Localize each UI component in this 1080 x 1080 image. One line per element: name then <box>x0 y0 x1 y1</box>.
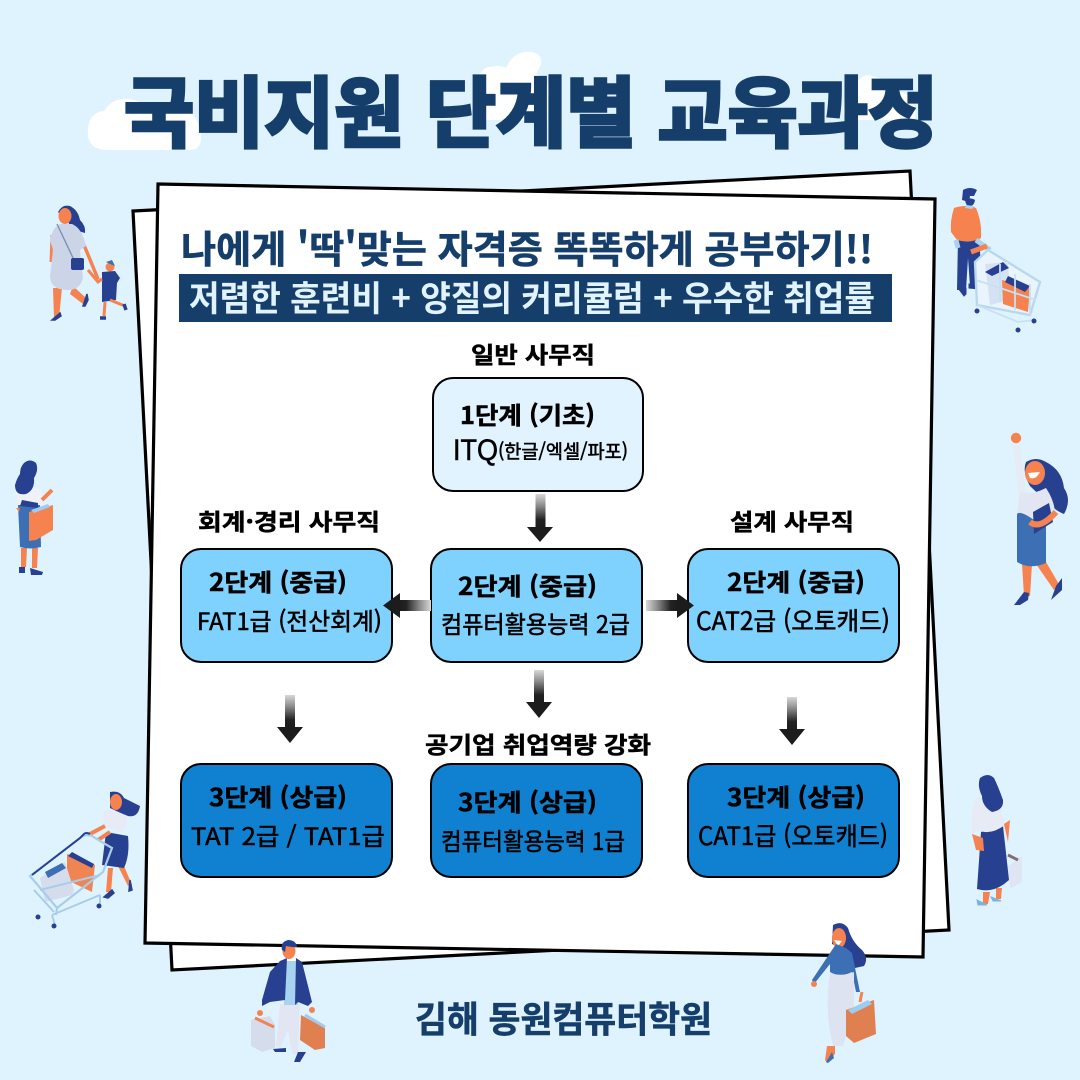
box: stage 3 accounting <box>181 764 392 877</box>
arrow: right down <box>779 697 805 745</box>
box: stage 2 accounting <box>181 549 392 662</box>
box: stage 3 accounting: TAT 2급 / TAT1급 <box>191 817 385 852</box>
box: stage 2 center: 컴퓨터활용능력 2급 <box>441 605 630 640</box>
footer: 김해 동원컴퓨터학원 <box>415 991 712 1043</box>
box: stage 1 <box>433 378 643 491</box>
box: stage 3 center: 3단계 (상급) <box>458 783 597 818</box>
icon: woman with shopping bag <box>15 460 53 575</box>
icon: woman from behind <box>971 775 1022 905</box>
banner <box>179 271 892 322</box>
cloud: center <box>475 52 549 120</box>
cloud: left <box>88 99 201 150</box>
box: stage 1: 1단계 (기초) <box>460 396 595 431</box>
icon: mother and child <box>50 206 126 320</box>
box: stage 3 design <box>688 764 899 877</box>
box: stage 2 center: 2단계 (중급) <box>458 567 597 602</box>
box: stage 2 accounting: FAT1급 (전산회계) <box>197 602 382 637</box>
box: stage 2 accounting: 2단계 (중급) <box>209 563 347 598</box>
icon: man with cart <box>951 188 1040 332</box>
arrow: left down <box>277 695 303 743</box>
box: stage 3 design: CAT1급 (오토캐드) <box>698 817 888 853</box>
arrow: to design <box>646 593 694 618</box>
cloud: right <box>844 75 915 121</box>
box: stage 2 design <box>688 549 899 662</box>
icon: woman walking with bag <box>811 923 876 1063</box>
box: stage 3 design: 3단계 (상급) <box>727 778 865 813</box>
arrow: stage 1 to stage 2 <box>527 494 553 542</box>
box: stage 1: ITQ <box>453 434 498 467</box>
heading: general office: 일반 사무직 <box>471 336 595 370</box>
box: stage 3 center <box>431 764 642 877</box>
heading: accounting office: 회계·경리 사무직 <box>198 503 380 537</box>
box: stage 1: (한글/엑셀/파포) <box>498 437 628 464</box>
banner text: 저렴한 훈련비 + 양질의 커리큘럼 + 우수한 취업률 <box>189 271 875 322</box>
box: stage 3 center: 컴퓨터활용능력 1급 <box>441 822 625 857</box>
box: stage 2 design: 2단계 (중급) <box>727 563 865 598</box>
panel: back sheet <box>133 171 949 970</box>
icon: woman raising arm <box>1011 433 1068 605</box>
arrow: to accounting <box>383 593 431 618</box>
heading: public enterprise: 공기업 취업역량 강화 <box>425 726 651 760</box>
box: stage 2 center <box>431 549 642 662</box>
subtitle: 나에게 '딱'맞는 자격증 똑똑하게 공부하기!! <box>181 219 873 274</box>
icon: man with shopping bags <box>251 940 325 1062</box>
box: stage 2 design: CAT2급 (오토캐드) <box>696 602 890 638</box>
panel: front sheet <box>145 184 935 957</box>
heading: design office: 설계 사무직 <box>730 503 854 537</box>
arrow: center down <box>526 670 552 718</box>
box: stage 3 accounting: 3단계 (상급) <box>209 778 347 813</box>
icon: woman pushing cart <box>30 792 140 928</box>
title: 국비지원 단계별 교육과정 <box>124 53 938 164</box>
